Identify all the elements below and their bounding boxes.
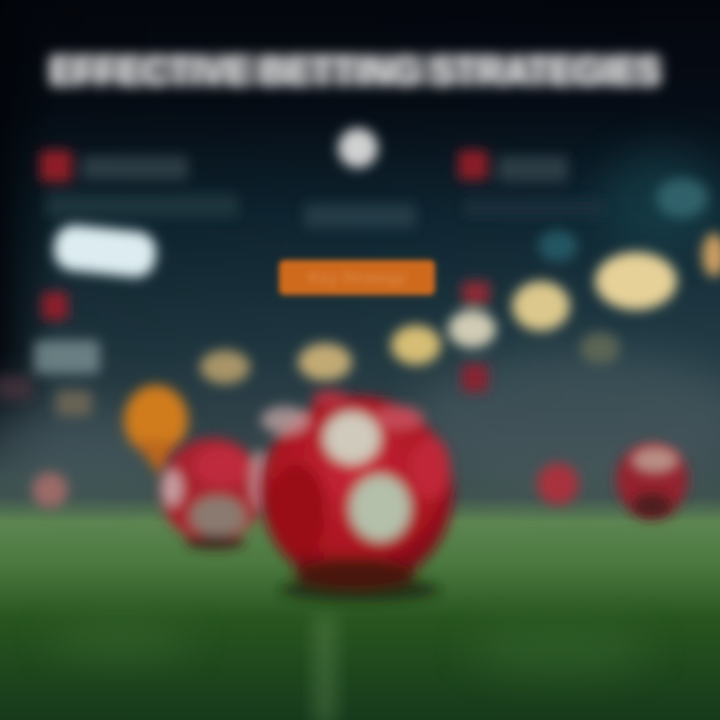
- callout: orange button: [279, 260, 435, 295]
- chart: glowing timeline nodes: [200, 178, 720, 392]
- panel: left column labels: [0, 292, 100, 416]
- icon: main football: [261, 390, 453, 602]
- callout: white pill: [52, 223, 158, 279]
- icon: center white circle: [338, 128, 378, 168]
- icon: medium football: [160, 438, 274, 549]
- panel: left strategy heading: [40, 150, 238, 218]
- callout: orange button: Key Strategy: [308, 270, 406, 287]
- icon: right red badge: [458, 150, 488, 180]
- icon: far small balls: [32, 444, 688, 518]
- icon: orange marker: [124, 385, 188, 476]
- panel: right strategy heading: [458, 150, 604, 218]
- icon: left red badge: [40, 150, 72, 182]
- panel: center strategy heading: [304, 128, 416, 228]
